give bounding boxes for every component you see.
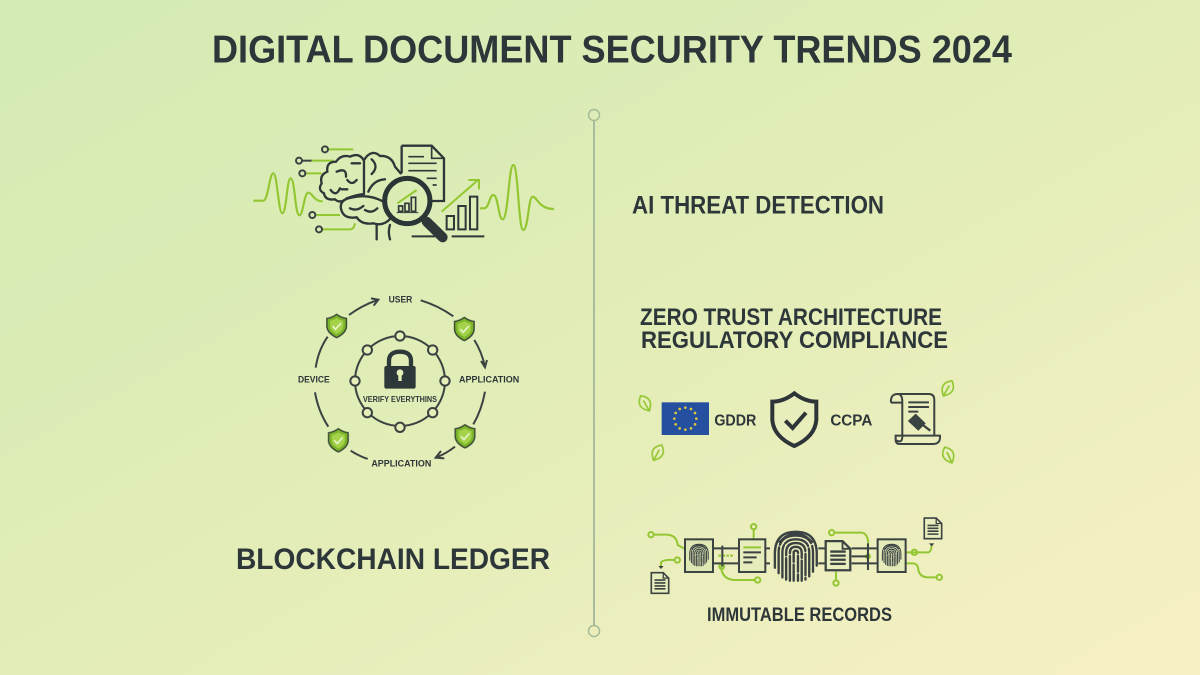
heading: zero trust architecture and regulatory compliance: ZERO TRUST ARCHITECTURE: [640, 304, 942, 331]
icon: AI brain with document and magnifier: [253, 146, 554, 239]
icons: regulatory compliance row: [636, 378, 957, 465]
arrowheads: [658, 543, 934, 569]
magnifier: [427, 222, 443, 237]
heading: zero trust architecture and regulatory compliance: [640, 304, 948, 354]
inner ring: [350, 331, 450, 432]
icon: zero trust verification ring: [298, 295, 520, 469]
block: ledger: [739, 539, 765, 572]
small documents: [651, 573, 669, 593]
leaves: [636, 378, 957, 465]
document: [402, 146, 444, 201]
shield check: [772, 393, 816, 446]
GDDR label: GDDR: [714, 412, 756, 429]
icon: zero trust verification ring: DEVICE: [298, 375, 330, 385]
label: immutable records: IMMUTABLE RECORDS: [707, 604, 892, 626]
lock: [384, 352, 416, 389]
legal scroll with gavel: [891, 394, 940, 444]
icon: zero trust verification ring: APPLICATION: [459, 375, 520, 385]
EU flag: [662, 402, 709, 435]
icon: zero trust verification ring: VERIFY EVERYTHINS: [363, 395, 438, 404]
green circuit traces: [648, 524, 942, 586]
icon: blockchain fingerprint chain: [648, 518, 942, 593]
center timeline divider: [588, 110, 600, 636]
block: fingerprint right: [878, 539, 906, 572]
heading: zero trust architecture and regulatory compliance: REGULATORY COMPLIANCE: [641, 327, 948, 354]
outer arcs: [315, 298, 487, 459]
title: DIGITAL DOCUMENT SECURITY TRENDS 2024: [212, 28, 1012, 72]
icon: zero trust verification ring: APPLICATION: [371, 459, 432, 469]
heading: blockchain ledger: BLOCKCHAIN LEDGER: [236, 543, 550, 576]
ring labels: USER: [389, 295, 413, 305]
growth bars and arrow: [442, 180, 479, 212]
heading: AI threat detection: AI THREAT DETECTION: [632, 192, 884, 220]
brain: [320, 153, 401, 239]
chain links: [713, 543, 877, 570]
large fingerprint: [775, 532, 817, 581]
shields: [327, 314, 475, 452]
circuit nodes: [296, 146, 355, 232]
block: document: [826, 541, 850, 570]
CCPA label: CCPA: [830, 412, 872, 429]
block: fingerprint left: [685, 539, 713, 572]
heartbeat waves: [253, 165, 554, 230]
